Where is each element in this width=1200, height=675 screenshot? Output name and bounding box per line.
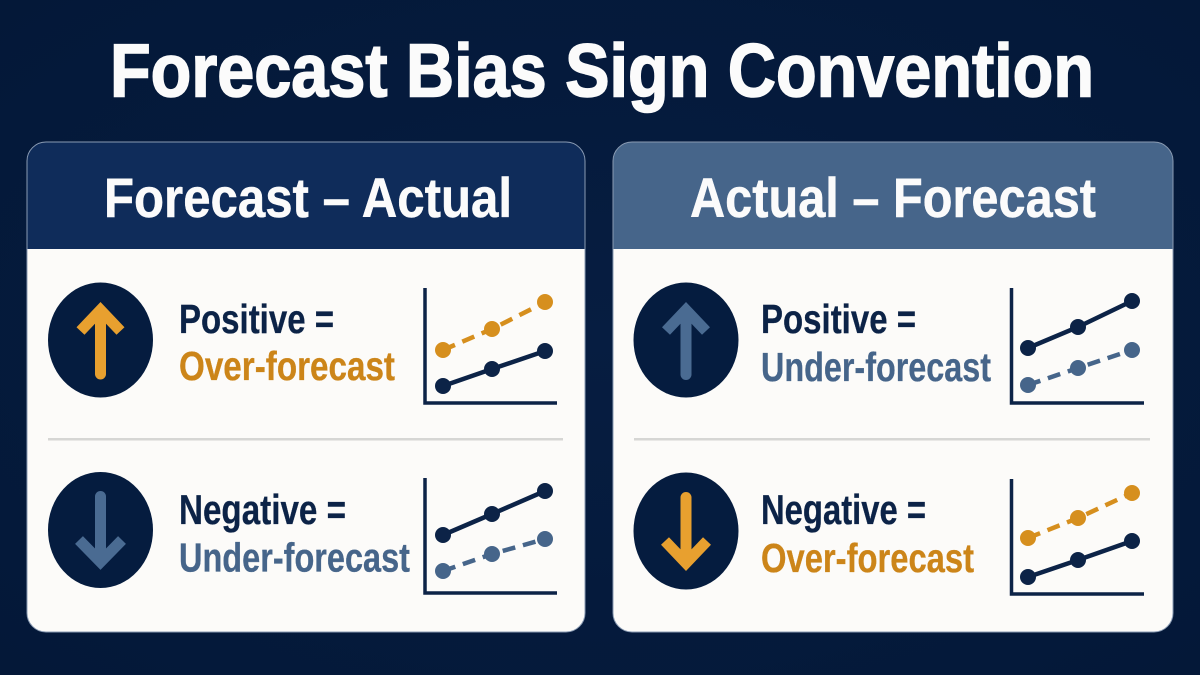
icon: down arrow [48, 472, 153, 588]
label: over-forecast: Over-forecast [179, 343, 395, 389]
label: positive: Positive = [179, 296, 334, 342]
label: under-forecast: Under-forecast [179, 534, 410, 580]
panel header: forecast minus actual: Forecast – Actual [104, 166, 512, 229]
icon: down arrow [634, 472, 738, 590]
label: over-forecast: Over-forecast [761, 535, 974, 581]
title: Forecast Bias Sign Convention [110, 28, 1094, 112]
panel: forecast minus actual [27, 142, 585, 632]
row: negative over-forecast [634, 472, 1144, 594]
line chart: forecast above actual [1012, 479, 1144, 594]
row: positive under-forecast [634, 282, 1144, 403]
label: under-forecast: Under-forecast [761, 344, 991, 390]
label: negative: Negative = [761, 486, 926, 533]
label: positive: Positive = [761, 296, 916, 342]
line chart: actual above forecast [1012, 288, 1144, 403]
label: negative: Negative = [179, 486, 346, 533]
panel header: actual minus forecast [613, 142, 1173, 249]
panel: actual minus forecast [613, 142, 1173, 632]
panel header: forecast minus actual [27, 142, 585, 249]
icon: up arrow [48, 282, 153, 398]
line chart: forecast above actual [425, 288, 557, 403]
line chart: actual above forecast [425, 478, 557, 593]
row: positive over-forecast [48, 282, 557, 403]
panel header: actual minus forecast: Actual – Forecast [690, 166, 1096, 229]
row: negative under-forecast [48, 472, 557, 593]
icon: up arrow [634, 282, 738, 398]
